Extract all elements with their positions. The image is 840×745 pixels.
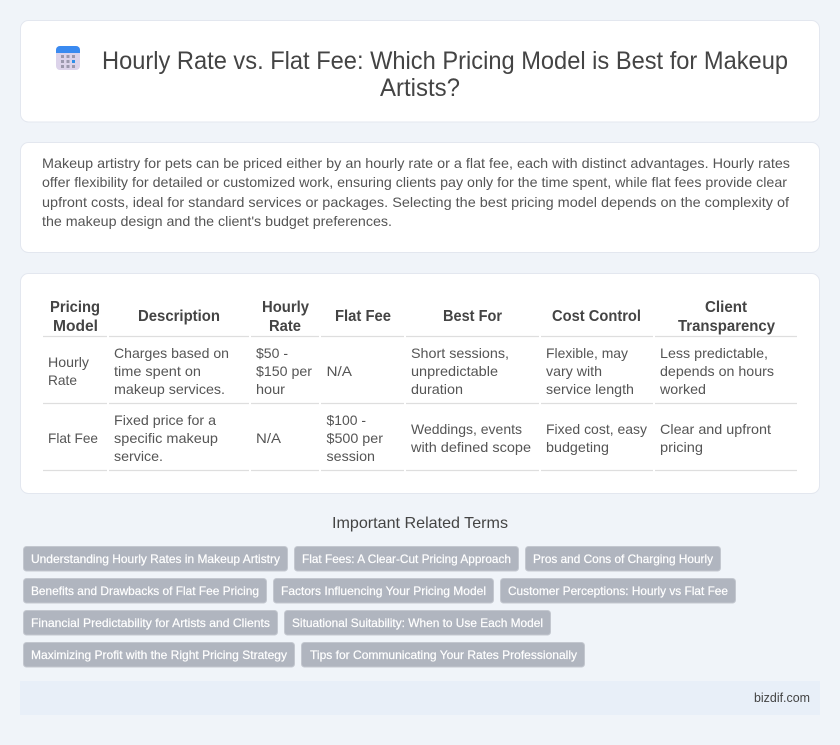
text block: description: the makeup design and the client's budget preferences. [42, 213, 392, 229]
tag [302, 642, 584, 667]
title: Artists? [380, 74, 460, 102]
table row: hourly rate: depends on hours [660, 363, 774, 379]
table row: flat fee: specific makeup [114, 430, 218, 446]
table row: flat fee: pricing [660, 439, 703, 455]
tag [294, 546, 518, 571]
table header row: Pricing [50, 299, 100, 316]
table row: hourly rate: makeup services. [114, 381, 225, 397]
title [102, 47, 788, 102]
text block: description [42, 155, 790, 229]
heading: related terms: Important Related Terms [332, 515, 508, 532]
table header row: Hourly [262, 299, 309, 316]
tag [24, 610, 278, 635]
tag [24, 642, 294, 667]
table row: flat fee: budgeting [546, 439, 609, 455]
table row: hourly rate: vary with [546, 363, 602, 379]
table header row: Transparency [678, 318, 775, 335]
table row: hourly rate: Hourly [48, 354, 89, 370]
table header row: Flat Fee [335, 308, 391, 325]
table header row: Rate [269, 318, 301, 335]
table row: flat fee: Fixed cost, easy [546, 421, 647, 437]
table row: hourly rate: Flexible, may [546, 345, 628, 361]
table header row: Description [138, 308, 220, 325]
table row: hourly rate: hour [256, 381, 285, 397]
table row: hourly rate: unpredictable [411, 363, 498, 379]
table row: flat fee: session [326, 448, 375, 464]
table row: flat fee: Weddings, events [411, 421, 522, 437]
tag [526, 546, 720, 571]
text block: description: offer flexibility for detailed or customized work, ensuring clients pay only for the time spent, while flat fees provide clear [42, 174, 787, 190]
table header row [50, 299, 775, 335]
table row: hourly rate: worked [659, 381, 706, 397]
footer [20, 681, 820, 715]
table header row: Model [53, 318, 98, 335]
table header row: Client [705, 299, 748, 316]
icon: calendar [56, 46, 80, 70]
table row: flat fee: Clear and upfront [660, 421, 771, 437]
title: Hourly Rate vs. Flat Fee: Which Pricing Model is Best for Makeup [102, 47, 788, 75]
tag: Maximizing Profit with the Right Pricing Strategy [31, 648, 287, 662]
table row: hourly rate: N/A [326, 363, 353, 379]
tag [284, 610, 550, 635]
table row: flat fee: with defined scope [410, 439, 531, 455]
tag: Understanding Hourly Rates in Makeup Artistry [31, 552, 280, 566]
table row: hourly rate: Rate [48, 372, 77, 388]
table header row: Cost Control [552, 308, 641, 325]
table row: flat fee: Flat Fee [48, 430, 98, 446]
panel: comparison table [20, 274, 820, 494]
tag [24, 546, 288, 571]
table row: hourly rate: Less predictable, [660, 345, 768, 361]
tag: Financial Predictability for Artists and Clients [31, 616, 270, 630]
tag: Pros and Cons of Charging Hourly [533, 552, 713, 566]
table row: flat fee: $500 per [326, 430, 383, 446]
panel: title card [20, 20, 820, 122]
table row: hourly rate: $50 - [256, 345, 288, 361]
tag: Flat Fees: A Clear-Cut Pricing Approach [302, 552, 511, 566]
table row: flat fee [48, 412, 771, 464]
tag: Factors Influencing Your Pricing Model [281, 584, 486, 598]
tag: Situational Suitability: When to Use Each Model [292, 616, 543, 630]
table row: hourly rate: Charges based on [114, 345, 229, 361]
table row: flat fee: N/A [256, 430, 282, 446]
table row: hourly rate: $150 per [256, 363, 312, 379]
table row: hourly rate: Short sessions, [411, 345, 509, 361]
tag: Tips for Communicating Your Rates Professionally [310, 648, 577, 662]
table row: flat fee: Fixed price for a [114, 412, 216, 428]
tag: Benefits and Drawbacks of Flat Fee Pricing [31, 584, 259, 598]
footer: bizdif.com [754, 691, 810, 705]
table row: hourly rate: time spent on [114, 363, 201, 379]
tag [500, 578, 736, 603]
panel: related term tags [24, 546, 736, 667]
text block: description: upfront costs, ideal for standard services or packages. Selecting the best pricing model depends on the complexity of [42, 194, 789, 210]
text block: description: Makeup artistry for pets can be priced either by an hourly rate or a flat fee, each with distinct advantages. Hourly rates [42, 155, 790, 171]
table row: hourly rate: duration [411, 381, 463, 397]
tag [24, 578, 266, 603]
table row: flat fee: $100 - [326, 412, 366, 428]
table row: flat fee: service. [114, 448, 163, 464]
tag [274, 578, 494, 603]
table row: hourly rate [48, 345, 774, 397]
table header row: Best For [443, 308, 502, 325]
table row: hourly rate: service length [546, 381, 634, 397]
panel: description [20, 142, 820, 252]
tag: Customer Perceptions: Hourly vs Flat Fee [508, 584, 728, 598]
